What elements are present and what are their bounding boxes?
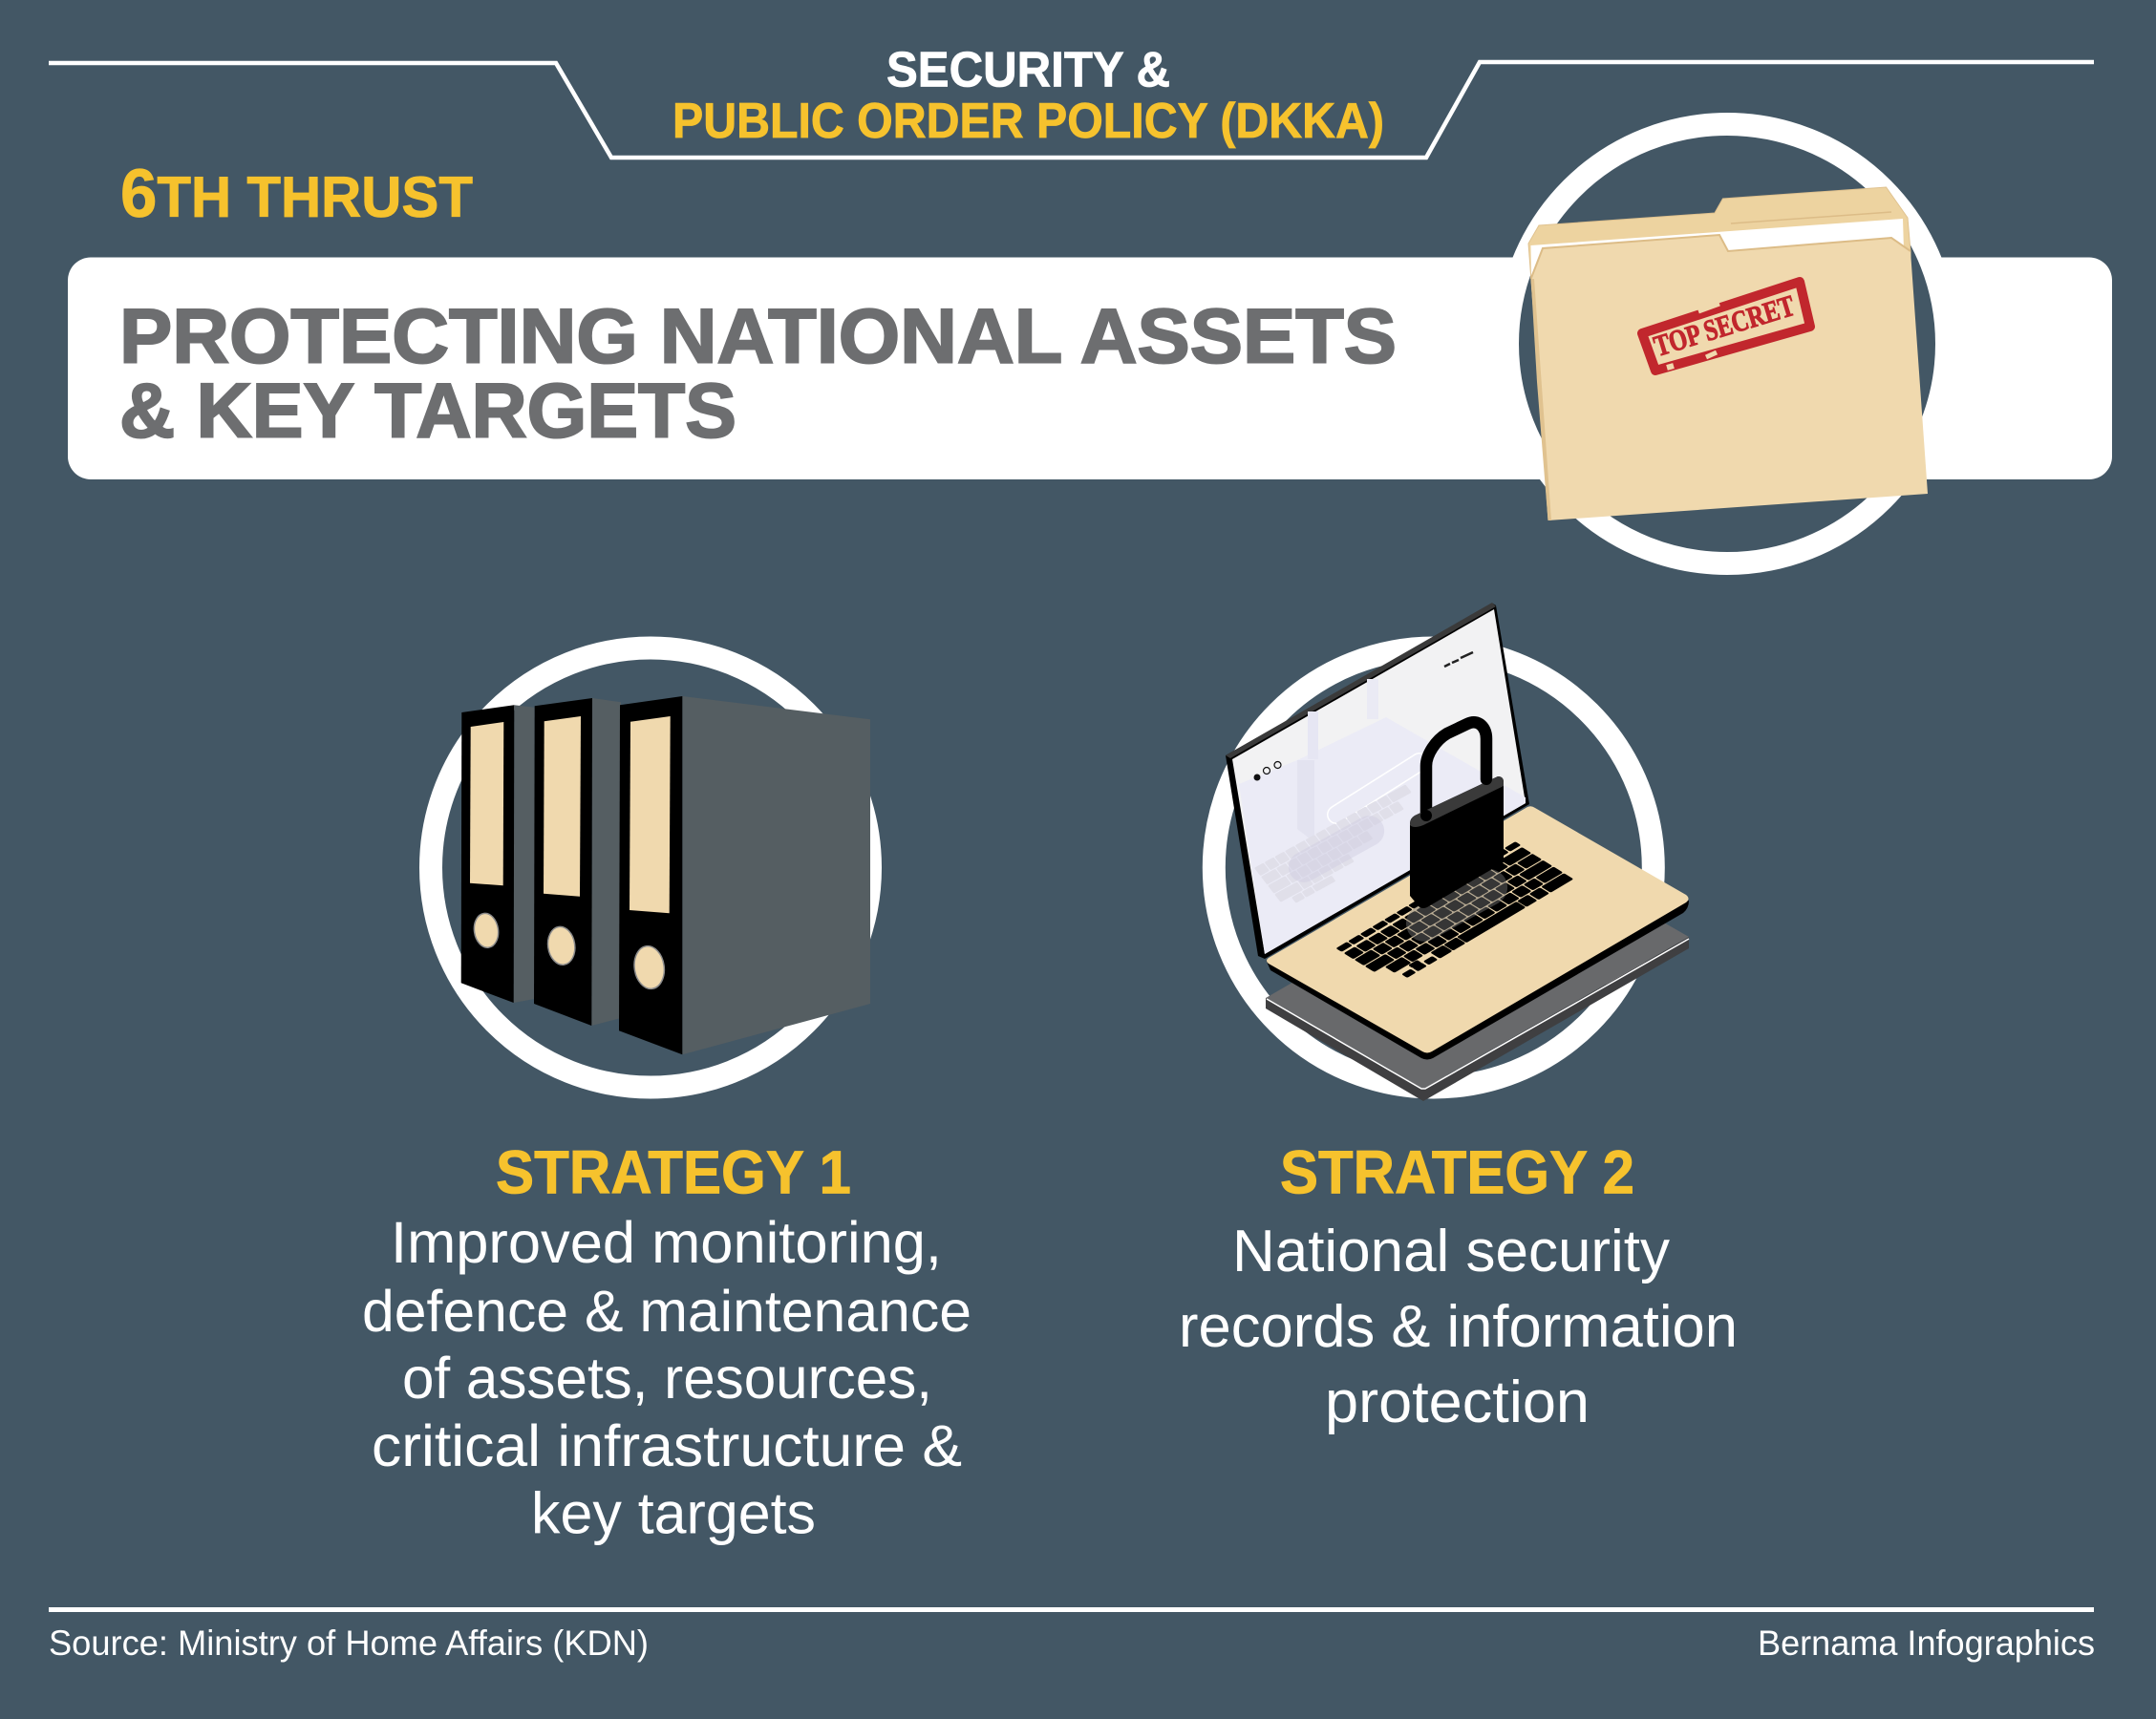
strategy 1 text: critical infrastructure &	[372, 1413, 962, 1478]
header title	[672, 42, 1384, 149]
header title: SECURITY &	[886, 42, 1170, 97]
padlock shadow	[1399, 862, 1514, 948]
padlock	[1410, 722, 1504, 908]
screen	[1226, 603, 1529, 959]
footer rule	[49, 1607, 2094, 1612]
strategy 2 heading: STRATEGY 2	[1280, 1138, 1634, 1207]
source: Source: Ministry of Home Affairs (KDN)	[49, 1623, 649, 1663]
ring: binders	[431, 647, 870, 1087]
credit: Bernama Infographics	[1758, 1623, 2095, 1663]
binder 2	[534, 698, 621, 1026]
icon: laptop with padlock	[1226, 603, 1689, 1101]
strategy 2 text: protection	[1325, 1369, 1590, 1435]
strategy 1 text: defence & maintenance	[362, 1279, 971, 1344]
white title band	[68, 258, 2112, 479]
header frame line	[49, 62, 2094, 158]
main heading: & KEY TARGETS	[119, 369, 736, 455]
strategy 2 text: National security	[1232, 1219, 1670, 1284]
strategy 1 heading: STRATEGY 1	[496, 1138, 851, 1207]
strategy 2 text: records & information	[1179, 1294, 1738, 1360]
strategy 1 text: of assets, resources,	[402, 1346, 932, 1411]
laptop base	[1267, 806, 1689, 1060]
main heading	[119, 294, 1397, 455]
keyboard	[1338, 843, 1572, 984]
base plate	[1266, 896, 1689, 1101]
binder 3	[619, 696, 870, 1054]
thrust label: 6TH THRUST	[120, 157, 473, 232]
strategy 2 text	[1179, 1219, 1738, 1435]
screen dots	[1253, 762, 1281, 781]
strategy 1 text: key targets	[531, 1481, 816, 1546]
screen keyboard reflection shade	[1283, 810, 1390, 888]
main heading: PROTECTING NATIONAL ASSETS	[119, 294, 1397, 380]
strategy 1 text	[362, 1210, 971, 1546]
icon: binders	[461, 696, 870, 1054]
binder 1	[461, 705, 535, 1003]
screen menu dashes	[1444, 652, 1473, 667]
ring: folder	[1507, 124, 1947, 563]
stamp: TOP SECRET	[1650, 288, 1799, 363]
header title: PUBLIC ORDER POLICY (DKKA)	[672, 94, 1384, 149]
ring: laptop	[1214, 647, 1654, 1087]
strategy 1 text: Improved monitoring,	[391, 1210, 942, 1275]
icon: top secret folder	[1528, 187, 1928, 520]
